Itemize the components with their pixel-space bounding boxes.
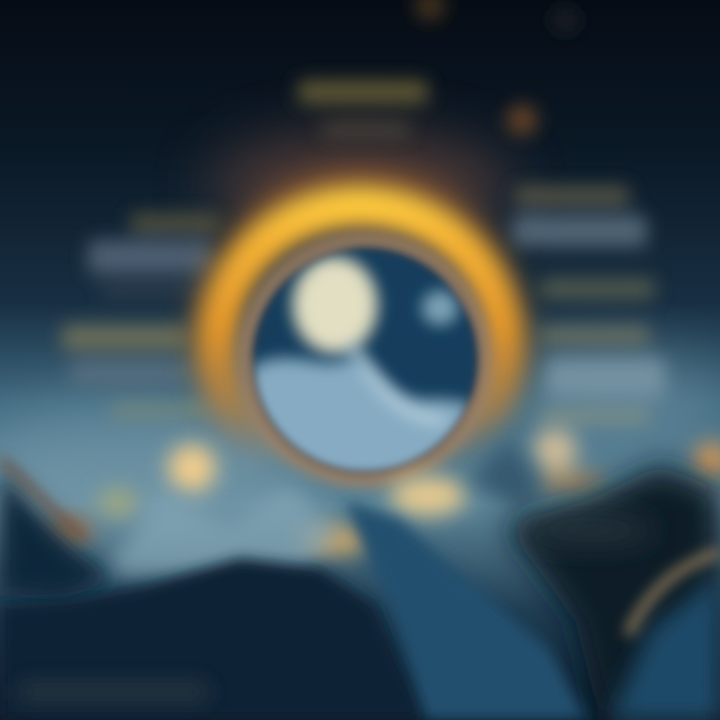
mid grey band on right range — [525, 516, 655, 544]
pale mid peaks — [100, 440, 545, 575]
moon — [293, 257, 377, 353]
small cloud — [422, 291, 458, 325]
disc frame — [245, 240, 485, 480]
central ridge — [345, 500, 590, 720]
left ridge highlight — [0, 460, 85, 540]
wave crest — [350, 345, 445, 420]
right dark range — [505, 465, 720, 720]
disc contents — [240, 240, 490, 480]
ring body — [218, 207, 502, 483]
top heading block — [298, 80, 428, 138]
foreground left range — [0, 558, 425, 720]
moon disc — [240, 240, 490, 480]
far-right mountain — [610, 575, 720, 720]
golden ring — [204, 182, 516, 498]
mountains — [0, 460, 720, 720]
warm glow behind ring — [210, 135, 510, 235]
right text block — [512, 186, 665, 422]
bottom caption block — [18, 682, 208, 702]
ring outer glow — [204, 182, 516, 498]
waves — [240, 358, 490, 480]
decorative orbs — [415, 0, 578, 136]
pale haze above the mountains — [0, 400, 300, 540]
left dark peak — [0, 470, 115, 600]
left text block — [62, 214, 220, 417]
right pale haze — [510, 355, 720, 445]
glowing lights on peaks — [48, 428, 720, 555]
night sky — [248, 244, 482, 411]
gold ridge line — [628, 552, 720, 635]
